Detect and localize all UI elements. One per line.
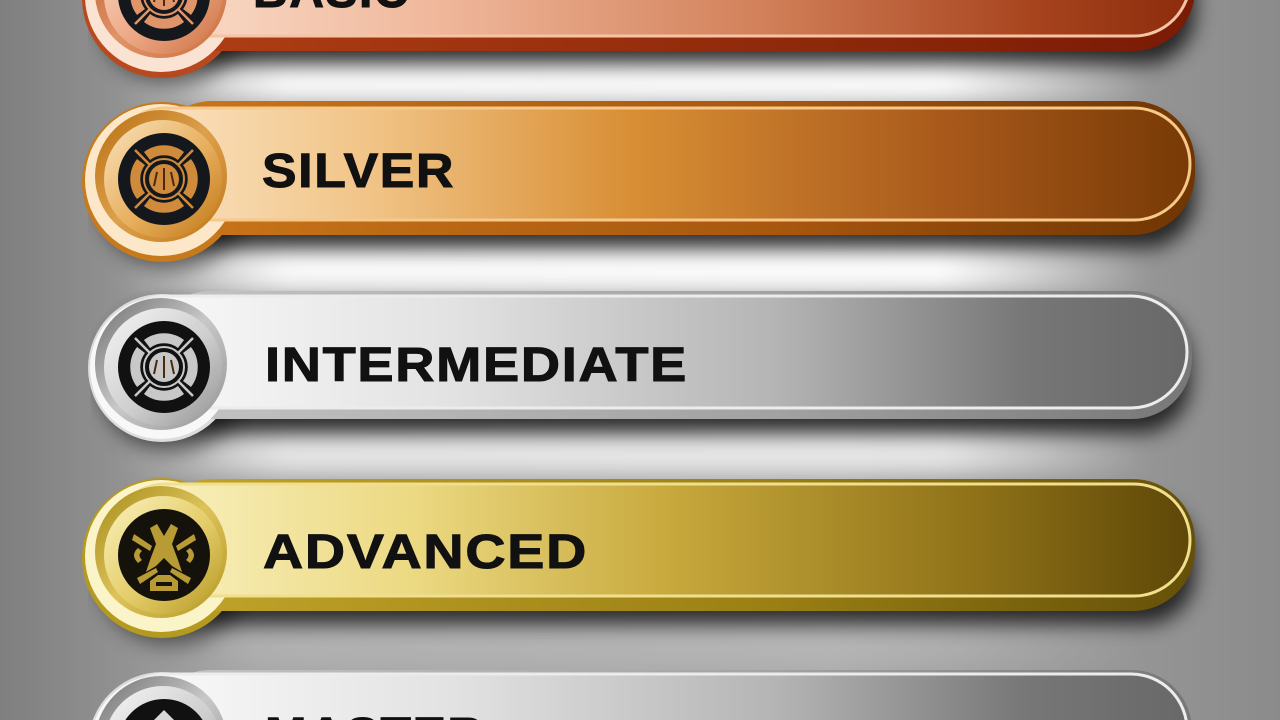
icon: bronze emblem — [135, 150, 193, 208]
label: ADVANCED: ADVANCED — [263, 526, 588, 579]
tier: Basic (copper) — [82, 0, 1195, 87]
tier: Master (platinum, cropped) — [88, 670, 1192, 720]
tier: Silver (bronze) — [82, 101, 1195, 271]
tier: Advanced (gold) — [82, 478, 1195, 647]
icon: gold emblem — [132, 524, 196, 591]
icon: copper emblem — [135, 0, 193, 24]
icon: platinum emblem — [150, 710, 178, 720]
tier: Intermediate (silver) — [88, 291, 1192, 454]
label: INTERMEDIATE: INTERMEDIATE — [265, 339, 688, 392]
icon: silver emblem — [135, 338, 193, 396]
label: SILVER: SILVER — [262, 145, 455, 198]
